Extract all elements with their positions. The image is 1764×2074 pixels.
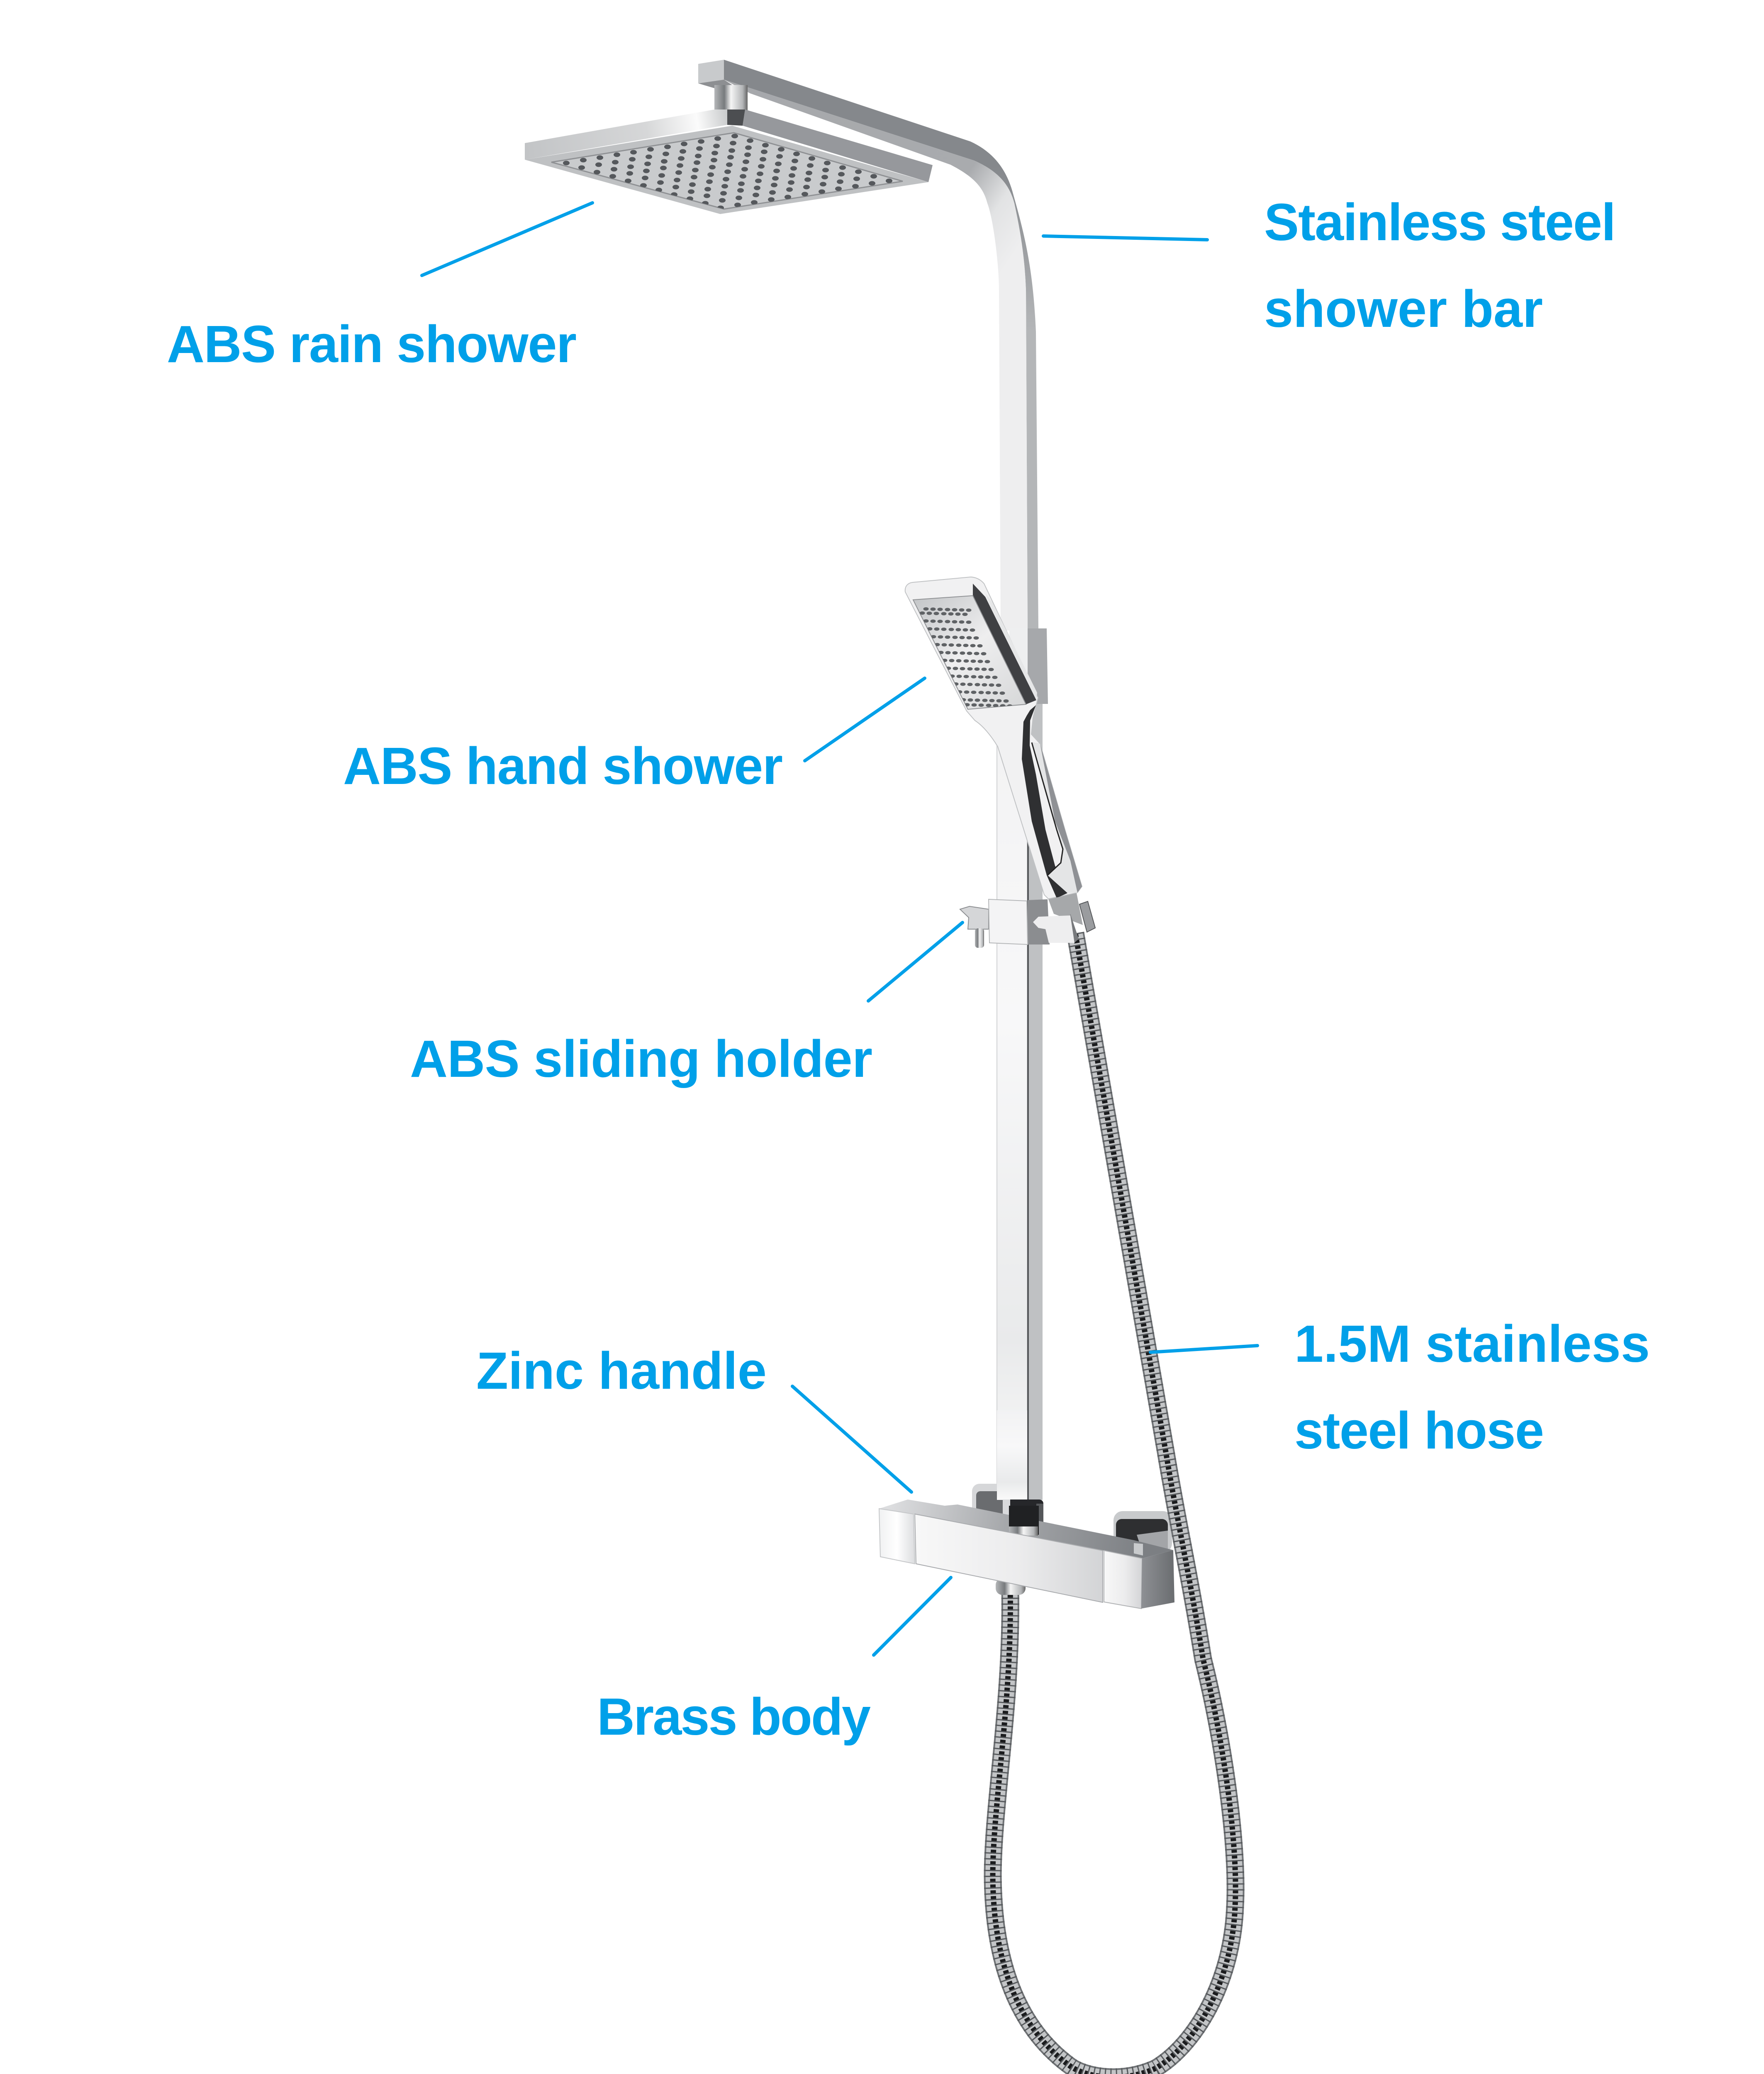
callout: ABS hand shower: ABS hand shower	[343, 737, 783, 795]
right wall mount	[1113, 1511, 1172, 1553]
zinc handle left cap	[879, 1509, 915, 1564]
lower sliding rail	[997, 704, 1043, 1500]
right cap front	[1104, 1551, 1142, 1609]
1.5M stainless steel hose	[993, 933, 1235, 2074]
callout: ABS sliding holder	[410, 923, 962, 1088]
ABS hand shower	[905, 577, 1083, 925]
holder side	[1028, 899, 1050, 944]
hand shower handle lower facet	[1032, 742, 1077, 893]
hand shower rim highlight	[985, 593, 1037, 700]
body front face	[915, 1514, 1103, 1602]
callout: zinc handle: Zinc handle	[476, 1341, 767, 1400]
holder left knob	[960, 906, 989, 929]
rain head corner	[727, 110, 745, 126]
ABS rain shower head	[525, 85, 933, 214]
bar end underside	[698, 80, 732, 89]
callout: ABS sliding holder: ABS sliding holder	[410, 1030, 872, 1088]
callout: brass body	[597, 1577, 951, 1746]
callout: zinc handle	[476, 1341, 911, 1492]
upper bent pipe side	[724, 60, 1038, 630]
hand shower handle dark reflection	[1022, 705, 1067, 898]
holder front box	[989, 899, 1028, 944]
callout: ABS rain shower: ABS rain shower	[167, 315, 577, 373]
hand shower nozzle holes	[919, 607, 1012, 708]
callout: 1.5M stainless steel hose: steel hose	[1294, 1401, 1544, 1460]
shower system product	[525, 60, 1235, 2074]
upper bent pipe front face	[724, 80, 1028, 630]
hand shower face plate	[913, 596, 1026, 709]
callout: ABS rain shower	[167, 203, 592, 373]
right cap side	[1141, 1550, 1174, 1609]
slider bracket on pipe	[1009, 628, 1048, 704]
body top surface	[879, 1500, 1173, 1558]
rail lower end over connector	[997, 1410, 1027, 1500]
hexagonal connector	[1003, 1500, 1043, 1541]
small tab on right cap	[1134, 1543, 1143, 1556]
hand shower handle insert line	[1032, 742, 1063, 875]
stainless steel shower bar	[698, 60, 1048, 1500]
holder lower knob	[975, 928, 984, 948]
callout: brass body: Brass body	[597, 1687, 871, 1746]
callout: stainless steel shower bar: shower bar	[1264, 280, 1543, 338]
hand shower side band	[973, 584, 1036, 704]
callout: stainless steel shower bar: Stainless steel	[1264, 193, 1616, 251]
holder arm	[1033, 914, 1079, 943]
bar end cap	[698, 60, 724, 83]
rain head underside	[525, 126, 928, 214]
rain head nozzle plate	[551, 133, 903, 209]
ABS sliding holder	[960, 899, 1095, 948]
rain head neck	[714, 85, 748, 112]
connector over top surface	[1009, 1506, 1039, 1536]
rain head left rim	[525, 110, 728, 160]
brass thermostatic body with zinc handle	[879, 1500, 1174, 1609]
knurled hose connector	[1048, 893, 1083, 925]
callout: stainless steel shower bar	[1043, 193, 1616, 338]
callout: ABS hand shower	[343, 678, 925, 795]
wall mounts	[972, 1484, 1172, 1553]
left wall mount	[972, 1484, 1018, 1525]
rain head right rim	[743, 110, 933, 182]
hose wall collar	[996, 1578, 1026, 1595]
rain head nozzle holes	[563, 134, 892, 210]
hand shower silhouette	[905, 577, 1082, 899]
callout: 1.5M stainless steel hose	[1150, 1315, 1650, 1460]
callout: 1.5M stainless steel hose: 1.5M stainless	[1294, 1315, 1650, 1373]
hand shower handle side	[1032, 742, 1082, 893]
holder clip	[1079, 901, 1095, 932]
